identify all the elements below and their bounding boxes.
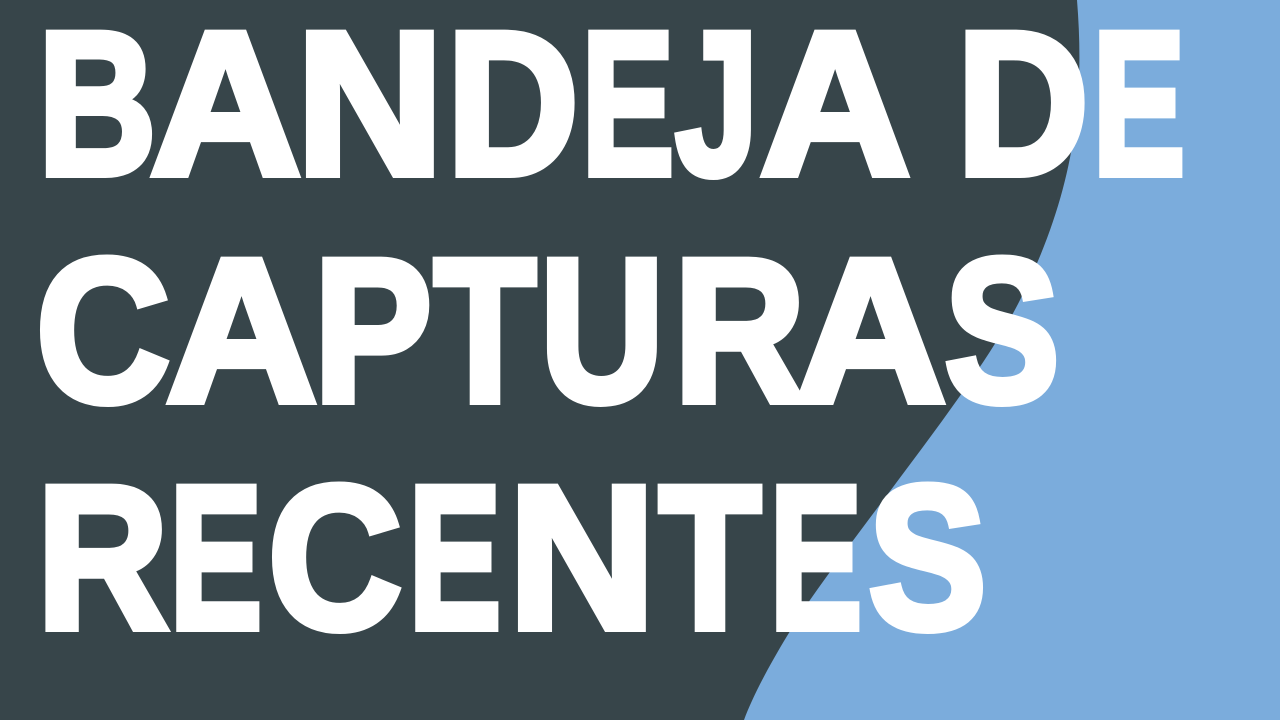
title line 2: A — [166, 217, 317, 445]
title line 2: T — [434, 217, 536, 445]
title line 3: R — [37, 444, 168, 672]
title line 2: A — [795, 217, 946, 445]
title line 3: E — [170, 444, 262, 672]
title line 2: R — [674, 217, 805, 445]
title line 2: U — [540, 217, 664, 445]
title line 2: P — [314, 217, 432, 445]
title line 3: E — [409, 444, 501, 672]
title line 3: E — [770, 444, 862, 672]
title line 2: S — [944, 217, 1060, 445]
title line 2: C — [36, 217, 170, 445]
title line 3: C — [268, 444, 402, 672]
title line 3: N — [508, 444, 656, 672]
title line 3: T — [659, 444, 761, 672]
background shape: blue curved panel — [744, 0, 1280, 720]
title line 3: S — [868, 444, 986, 672]
